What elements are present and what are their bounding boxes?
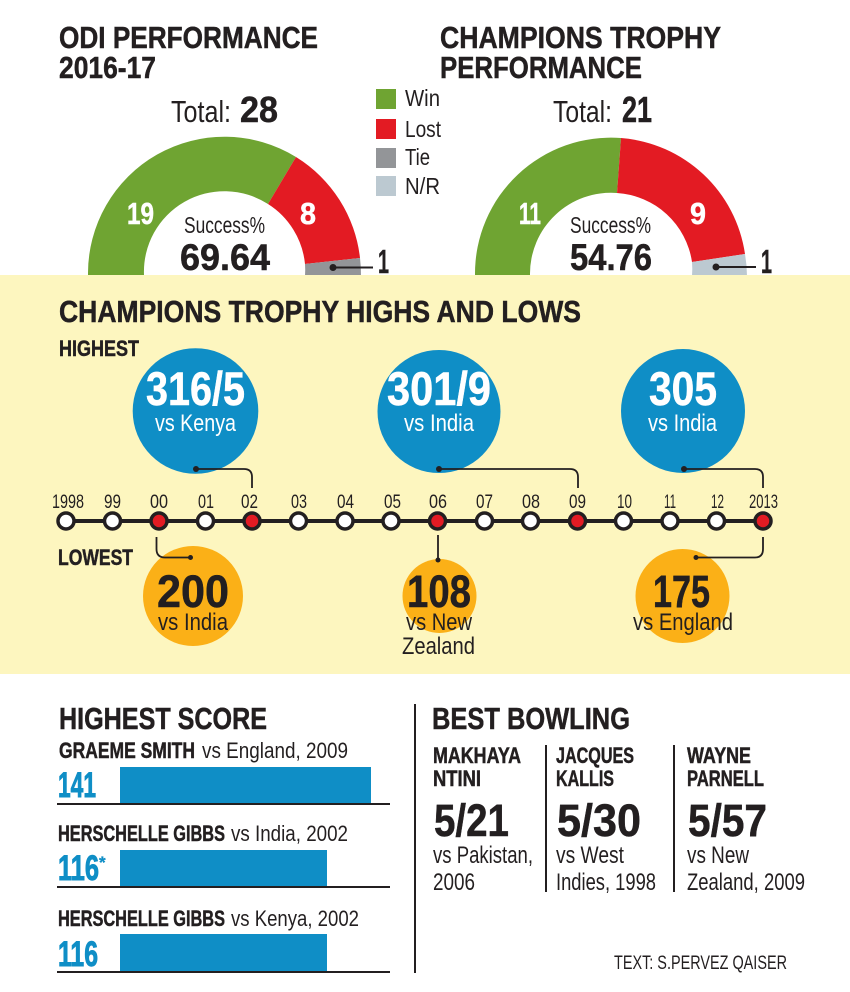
lowest: 108: Zealand	[402, 633, 475, 660]
success percentage	[570, 212, 652, 278]
success percentage: Success%	[570, 212, 651, 238]
highest: 301/9: vs India	[404, 410, 475, 437]
panel: best bowling	[432, 701, 805, 896]
bowler: Makhaya Ntini: MAKHAYA	[433, 743, 521, 768]
lowest: 175: 175	[653, 566, 710, 617]
semicircle chart: 9	[690, 196, 706, 231]
lowest: 108: vs New	[406, 609, 473, 636]
timeline: 06	[429, 492, 447, 513]
bowler: Wayne Parnell	[687, 743, 805, 896]
total matches	[553, 89, 652, 130]
success percentage: 54.76	[570, 237, 652, 278]
bowler: Jacques Kallis: JACQUES	[556, 743, 634, 768]
highest: 305	[621, 349, 745, 473]
row: Herschelle Gibbs 116	[57, 906, 390, 974]
lowest: 175: vs England	[633, 609, 733, 636]
lowest: 200: vs India	[158, 609, 229, 636]
timeline: 2013	[749, 492, 778, 513]
highest: 316/5	[133, 348, 258, 474]
timeline: 05	[384, 492, 401, 513]
legend: Tie	[405, 144, 430, 170]
lowest: 108	[402, 559, 476, 660]
timeline: 11	[664, 492, 676, 513]
lowest: 108: 108	[407, 566, 471, 617]
timeline: 03	[291, 492, 307, 513]
semicircle chart: 11	[519, 196, 541, 231]
callout: tie count	[330, 243, 389, 280]
legend: N/R	[405, 173, 440, 199]
legend: Lost	[405, 116, 441, 142]
row: Herschelle Gibbs 116*: 116	[58, 849, 99, 888]
lowest: 175	[633, 549, 733, 643]
row: Herschelle Gibbs 116: HERSCHELLE GIBBS	[58, 906, 225, 931]
legend: Win	[405, 85, 440, 111]
success percentage: 69.64	[180, 237, 270, 278]
timeline	[52, 492, 778, 529]
row: Herschelle Gibbs 116*: *	[99, 853, 106, 872]
timeline: 09	[569, 492, 586, 513]
heading: Champions Trophy performance: CHAMPIONS TROPHY	[440, 20, 721, 55]
row: Herschelle Gibbs 116*: vs India, 2002	[231, 821, 348, 846]
row: Herschelle Gibbs 116*: HERSCHELLE GIBBS	[58, 821, 225, 846]
lowest: 200: 200	[157, 566, 229, 617]
row: Graeme Smith 141: vs England, 2009	[202, 738, 348, 763]
heading: ODI performance: 2016-17	[59, 50, 156, 85]
semicircle chart	[475, 138, 747, 276]
highest: 301/9	[378, 350, 500, 473]
bowler: Wayne Parnell: vs New	[687, 842, 750, 869]
success percentage: Success%	[184, 212, 265, 238]
label: lowest: LOWEST	[58, 545, 133, 570]
legend	[376, 85, 441, 199]
bowler: Makhaya Ntini: vs Pakistan,	[433, 842, 533, 869]
label: highest: HIGHEST	[59, 336, 139, 361]
highest: 305: vs India	[648, 410, 718, 437]
panel: Champions Trophy performance	[440, 20, 772, 280]
callout: no result count: 1	[761, 243, 772, 280]
timeline: 02	[241, 492, 258, 513]
bowler: Wayne Parnell: Zealand, 2009	[687, 869, 805, 896]
highest: 305: 305	[649, 362, 717, 415]
bowler: Jacques Kallis	[556, 743, 656, 896]
semicircle chart	[88, 137, 361, 276]
row: Herschelle Gibbs 116: 116	[58, 935, 98, 974]
highest: 316/5: vs Kenya	[155, 410, 237, 437]
timeline: 99	[104, 492, 121, 513]
heading: Champions Trophy performance: PERFORMANCE	[440, 50, 642, 85]
highest: 316/5: 316/5	[146, 362, 245, 415]
total matches: Total:	[553, 94, 612, 129]
heading: ODI performance	[59, 20, 318, 85]
bowler: Wayne Parnell: 5/57	[688, 795, 767, 846]
timeline: 10	[617, 492, 632, 513]
row: Graeme Smith 141: GRAEME SMITH	[59, 738, 195, 763]
callout: tie count: 1	[378, 243, 389, 280]
bowler: Jacques Kallis: Indies, 1998	[556, 869, 656, 896]
row: Herschelle Gibbs 116*	[57, 821, 390, 888]
timeline: 08	[522, 492, 540, 513]
bowler: Makhaya Ntini: 5/21	[434, 795, 509, 846]
bowler: Wayne Parnell: PARNELL	[687, 766, 764, 791]
semicircle chart: 19	[127, 196, 154, 231]
timeline: 12	[711, 492, 724, 513]
heading: highest score: HIGHEST SCORE	[59, 701, 267, 736]
heading: best bowling: BEST BOWLING	[432, 701, 630, 736]
timeline: 04	[337, 492, 354, 513]
highest: 301/9: 301/9	[387, 362, 491, 415]
timeline: 07	[476, 492, 493, 513]
bowler: Makhaya Ntini	[433, 743, 533, 896]
heading: Champions Trophy performance	[440, 20, 721, 85]
panel: highs and lows	[0, 275, 850, 674]
bowler: Makhaya Ntini: NTINI	[433, 766, 481, 791]
bowler: Makhaya Ntini: 2006	[433, 869, 475, 896]
timeline: 00	[150, 492, 168, 513]
panel: highest score	[57, 701, 390, 974]
heading: ODI performance: ODI PERFORMANCE	[59, 20, 318, 55]
row: Graeme Smith 141	[57, 738, 390, 805]
bowler: Jacques Kallis: vs West	[556, 842, 624, 869]
total matches: 21	[622, 89, 652, 130]
timeline: 1998	[52, 492, 84, 513]
total matches: Total:	[171, 94, 231, 129]
bowler: Wayne Parnell: WAYNE	[687, 743, 751, 768]
panel: ODI performance	[59, 20, 389, 280]
bowler: Jacques Kallis: 5/30	[557, 795, 641, 846]
heading: highs and lows: CHAMPIONS TROPHY HIGHS AND LOWS	[59, 294, 581, 329]
total matches	[171, 89, 278, 130]
semicircle chart: 8	[300, 196, 316, 231]
bowler: Jacques Kallis: KALLIS	[556, 766, 614, 791]
connectors	[156, 466, 763, 562]
lowest: 200	[143, 546, 243, 646]
row: Herschelle Gibbs 116: vs Kenya, 2002	[231, 906, 359, 931]
timeline: 01	[198, 492, 214, 513]
success percentage	[180, 212, 270, 278]
total matches: 28	[240, 89, 278, 130]
callout: no result count	[712, 243, 772, 280]
credit: TEXT: S.PERVEZ QAISER	[614, 953, 787, 974]
row: Graeme Smith 141: 141	[58, 766, 96, 805]
